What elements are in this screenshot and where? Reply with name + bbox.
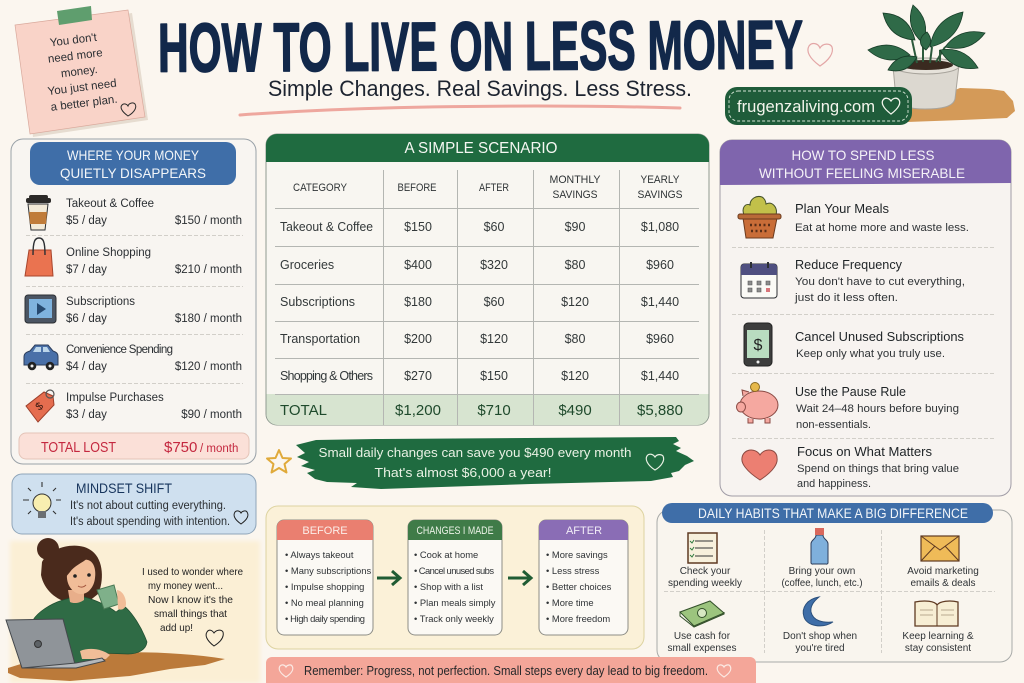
table column headers xyxy=(293,174,682,201)
panel heading xyxy=(30,142,236,185)
table column headers: AFTER xyxy=(479,182,509,194)
subtitle underline xyxy=(240,106,680,115)
panel: daily habits xyxy=(657,503,1012,662)
table column headers: SAVINGS xyxy=(552,189,598,201)
row: subscriptions: $6 / day xyxy=(66,313,107,325)
table row: subscriptions xyxy=(280,295,679,309)
note text: You just need xyxy=(47,78,117,98)
table row: transportation xyxy=(280,332,674,346)
sticky note xyxy=(15,6,148,137)
panel heading xyxy=(662,503,993,523)
icon: phone: $ xyxy=(754,337,763,354)
tip: plan your meals: Eat at home more and waste less. xyxy=(795,222,969,234)
panel: where your money disappears xyxy=(11,139,256,464)
illustration: woman with mug xyxy=(33,538,147,668)
panel heading: DAILY HABITS THAT MAKE A BIG DIFFERENCE xyxy=(698,506,968,521)
website badge: frugenzaliving.com xyxy=(737,97,875,116)
icon: checklist xyxy=(688,533,717,563)
table total band xyxy=(266,394,708,425)
table row: groceries: $400 xyxy=(404,258,432,272)
total lost row: $750 xyxy=(164,439,197,456)
savings banner xyxy=(296,437,694,489)
remember banner: Remember: Progress, not perfection. Small steps every day lead to big freedom. xyxy=(304,664,708,678)
table heading: A SIMPLE SCENARIO xyxy=(404,140,558,157)
speech text: Now I know it's the xyxy=(148,594,233,606)
icon: heart xyxy=(206,630,223,646)
panel heading: WITHOUT FEELING MISERABLE xyxy=(759,165,965,181)
table row: groceries: $960 xyxy=(646,258,674,272)
row: convenience spending: $120 / month xyxy=(175,361,242,373)
row: online shopping xyxy=(25,238,242,276)
icon: open book xyxy=(915,601,958,626)
note text: money. xyxy=(60,64,98,80)
tip: reduce frequency: Reduce Frequency xyxy=(795,257,902,272)
icon: heart xyxy=(717,665,731,677)
card: changes i made: • Track only weekly xyxy=(414,613,494,624)
row: online shopping: $210 / month xyxy=(175,264,242,276)
total lost row: / month xyxy=(200,443,238,455)
total lost row: TOTAL LOST xyxy=(41,439,116,456)
speech text xyxy=(142,566,243,634)
tip: plan your meals: Plan Your Meals xyxy=(795,201,889,216)
table row: subscriptions: $1,440 xyxy=(641,295,679,309)
icon: note heart xyxy=(121,103,136,116)
tip: focus on what matters: and happiness. xyxy=(797,478,871,490)
table column headers: SAVINGS xyxy=(638,189,682,201)
icon: car xyxy=(24,345,58,370)
icon: piggy bank xyxy=(736,382,778,423)
habit: check spending: Check your xyxy=(680,566,731,577)
row: impulse purchases: Impulse Purchases xyxy=(66,392,164,404)
table row: groceries xyxy=(280,258,674,272)
tip: focus on what matters xyxy=(742,444,959,490)
subtitle xyxy=(240,76,692,115)
icon: title heart xyxy=(808,44,832,66)
tip: cancel unused subscriptions: Keep only what you truly use. xyxy=(796,348,945,360)
habit: avoid marketing: emails & deals xyxy=(910,578,976,589)
habit: don't shop tired: Don't shop when xyxy=(783,631,857,642)
table row: transportation: $80 xyxy=(565,332,585,346)
table column headers: MONTHLY xyxy=(550,174,601,186)
card: after: • More freedom xyxy=(546,613,610,624)
icon: phone xyxy=(744,323,772,366)
table row: total: $1,200 xyxy=(395,402,441,419)
speech text: I used to wonder where xyxy=(142,566,243,578)
card: changes i made: CHANGES I MADE xyxy=(416,525,494,537)
table column headers: BEFORE xyxy=(398,182,436,194)
total lost row xyxy=(19,433,249,459)
panel heading: WHERE YOUR MONEY xyxy=(67,147,200,163)
card: after: • More time xyxy=(546,597,594,608)
icon: light bulb xyxy=(23,482,61,518)
illustration: potted plant xyxy=(868,5,1015,122)
habit: bring your own xyxy=(782,528,862,589)
table column headers: CATEGORY xyxy=(293,182,348,194)
table row: transportation: $120 xyxy=(480,332,508,346)
savings banner: Small daily changes can save you $490 every month xyxy=(318,445,632,460)
habit: keep learning xyxy=(902,601,974,654)
table row: total: $5,880 xyxy=(637,402,683,419)
row: impulse purchases: $90 / month xyxy=(181,409,242,421)
speech text: small things that xyxy=(154,608,227,620)
panel heading xyxy=(720,140,1011,185)
note text xyxy=(41,30,119,114)
habit: avoid marketing: Avoid marketing xyxy=(907,566,979,577)
icon: price tag xyxy=(26,390,54,422)
table row: shopping and others: $120 xyxy=(561,369,589,383)
table row: groceries: $320 xyxy=(480,258,508,272)
remember banner xyxy=(266,657,756,683)
habit: bring your own: Bring your own xyxy=(789,566,855,577)
icon: tablet play xyxy=(25,295,56,323)
table row: total: TOTAL xyxy=(280,402,327,419)
habit: use cash: small expenses xyxy=(668,643,736,654)
tip: use the pause rule: non-essentials. xyxy=(796,419,871,431)
table row: shopping and others: $270 xyxy=(404,369,432,383)
card: before: • No meal planning xyxy=(285,597,364,608)
card: before: • Impulse shopping xyxy=(285,581,364,592)
mug xyxy=(97,585,119,609)
savings banner: That's almost $6,000 a year! xyxy=(374,465,552,480)
speech text: my money went... xyxy=(148,580,223,592)
tip: cancel unused subscriptions: Cancel Unused Subscriptions xyxy=(795,329,964,344)
illustration: table xyxy=(8,652,225,681)
table row: takeout: $90 xyxy=(565,220,585,234)
panel heading: HOW TO SPEND LESS xyxy=(792,147,934,163)
panel: mindset shift xyxy=(12,474,256,534)
panel: mindset shift: It's about spending with intention. xyxy=(70,516,230,528)
table row: takeout: Takeout & Coffee xyxy=(280,220,373,234)
habit: avoid marketing xyxy=(907,536,979,589)
panel heading: QUIETLY DISAPPEARS xyxy=(60,165,206,181)
card: before: • High daily spending xyxy=(285,613,365,624)
table row: shopping and others xyxy=(280,369,679,383)
row: impulse purchases xyxy=(26,390,242,422)
note text: You don't xyxy=(49,32,98,49)
icon: shopping bag xyxy=(25,238,53,276)
table row: shopping and others: $1,440 xyxy=(641,369,679,383)
note text: need more xyxy=(47,47,103,66)
tip: use the pause rule xyxy=(736,382,959,431)
panel: mindset shift: MINDSET SHIFT xyxy=(76,480,172,496)
icon: calendar xyxy=(741,262,777,298)
table heading xyxy=(266,134,709,162)
card: before: BEFORE xyxy=(302,525,348,537)
card: changes i made: • Shop with a list xyxy=(414,581,483,592)
table row: transportation: $960 xyxy=(646,332,674,346)
row: subscriptions xyxy=(25,295,242,325)
icon: basket xyxy=(738,196,781,238)
table row: takeout: $150 xyxy=(404,220,432,234)
icon: filled heart xyxy=(742,450,777,480)
row: subscriptions: Subscriptions xyxy=(66,296,135,308)
habit: check spending: spending weekly xyxy=(668,578,742,589)
table row: total xyxy=(280,402,683,419)
habit: use cash xyxy=(668,601,736,654)
habit: don't shop tired: you're tired xyxy=(795,643,845,654)
table row: total: $490 xyxy=(558,402,592,419)
habit: don't shop tired xyxy=(783,597,857,654)
habit: check spending xyxy=(668,533,742,589)
illustration: laptop xyxy=(6,619,105,668)
table row: total: $710 xyxy=(477,402,511,419)
tip: plan your meals xyxy=(738,196,969,238)
row: subscriptions: $180 / month xyxy=(175,313,242,325)
card: before xyxy=(277,520,373,635)
tip: reduce frequency: You don't have to cut everything, xyxy=(795,276,965,288)
table row: takeout: $60 xyxy=(484,220,504,234)
table row: shopping and others: Shopping & Others xyxy=(280,369,373,383)
card: changes i made: • Cancel unused subs xyxy=(414,565,494,576)
row: takeout and coffee: $5 / day xyxy=(66,215,107,227)
tip: focus on what matters: Focus on What Matters xyxy=(797,444,932,459)
tip: reduce frequency xyxy=(741,257,965,304)
panel: how to spend less xyxy=(720,140,1011,496)
icon: heart xyxy=(279,665,293,677)
icon: envelope xyxy=(921,536,959,561)
subtitle: Simple Changes. Real Savings. Less Stress. xyxy=(268,76,692,101)
icon: moon xyxy=(803,597,833,626)
card: changes i made: • Plan meals simply xyxy=(414,597,496,608)
table row: subscriptions: $60 xyxy=(484,295,504,309)
row: impulse purchases: $3 / day xyxy=(66,409,107,421)
speech text: add up! xyxy=(160,622,193,634)
panel: mindset shift: It's not about cutting everything. xyxy=(70,500,226,512)
table row: transportation: Transportation xyxy=(280,332,360,346)
icon: price tag: $ xyxy=(33,400,46,413)
panel: before, changes, after xyxy=(266,506,644,649)
card: changes i made xyxy=(408,520,502,635)
icon: coffee cup xyxy=(26,195,51,230)
row: takeout and coffee xyxy=(26,195,242,230)
habit: bring your own: (coffee, lunch, etc.) xyxy=(782,578,862,589)
table row: subscriptions: $180 xyxy=(404,295,432,309)
row: convenience spending: Convenience Spending xyxy=(66,344,173,356)
table row: shopping and others: $150 xyxy=(480,369,508,383)
card: before: • Many subscriptions xyxy=(285,565,371,576)
icon: heart xyxy=(646,454,664,470)
table row: groceries: Groceries xyxy=(280,258,334,272)
table row: takeout: $1,080 xyxy=(641,220,679,234)
table row: subscriptions: $120 xyxy=(561,295,589,309)
habit: keep learning: stay consistent xyxy=(905,643,971,654)
habit: keep learning: Keep learning & xyxy=(902,631,974,642)
table row: subscriptions: Subscriptions xyxy=(280,295,355,309)
note text: a better plan. xyxy=(50,94,118,114)
card: changes i made: • Cook at home xyxy=(414,549,478,560)
tip: use the pause rule: Use the Pause Rule xyxy=(795,384,906,399)
tip: use the pause rule: Wait 24–48 hours before buying xyxy=(796,403,959,415)
table row: transportation: $200 xyxy=(404,332,432,346)
row: takeout and coffee: $150 / month xyxy=(175,215,242,227)
arrow xyxy=(377,571,400,585)
row: online shopping: $7 / day xyxy=(66,264,107,276)
tip: cancel unused subscriptions xyxy=(744,323,964,366)
row: online shopping: Online Shopping xyxy=(66,247,151,259)
row: convenience spending xyxy=(24,344,242,373)
table column headers: YEARLY xyxy=(640,174,680,186)
tape xyxy=(57,6,92,25)
card: after: • Less stress xyxy=(546,565,600,576)
arrow xyxy=(508,571,531,585)
table row: takeout xyxy=(280,220,679,234)
panel: personal reflection xyxy=(6,538,260,683)
tip: reduce frequency: just do it less often. xyxy=(794,292,898,304)
card: after xyxy=(539,520,628,635)
icon: star xyxy=(267,450,291,472)
card: after: AFTER xyxy=(566,525,602,537)
tip: focus on what matters: Spend on things that bring value xyxy=(797,463,959,475)
habit: use cash: Use cash for xyxy=(674,631,731,642)
icon: cash stack xyxy=(680,601,724,627)
panel: a simple scenario table xyxy=(266,134,709,425)
table row: groceries: $80 xyxy=(565,258,585,272)
icon: bottle xyxy=(811,528,828,564)
card: after: • More savings xyxy=(546,549,608,560)
icon: heart xyxy=(234,511,248,524)
website badge xyxy=(725,87,912,125)
row: takeout and coffee: Takeout & Coffee xyxy=(66,198,154,210)
card: before: • Always takeout xyxy=(285,549,354,560)
row: convenience spending: $4 / day xyxy=(66,361,107,373)
card: after: • Better choices xyxy=(546,581,612,592)
